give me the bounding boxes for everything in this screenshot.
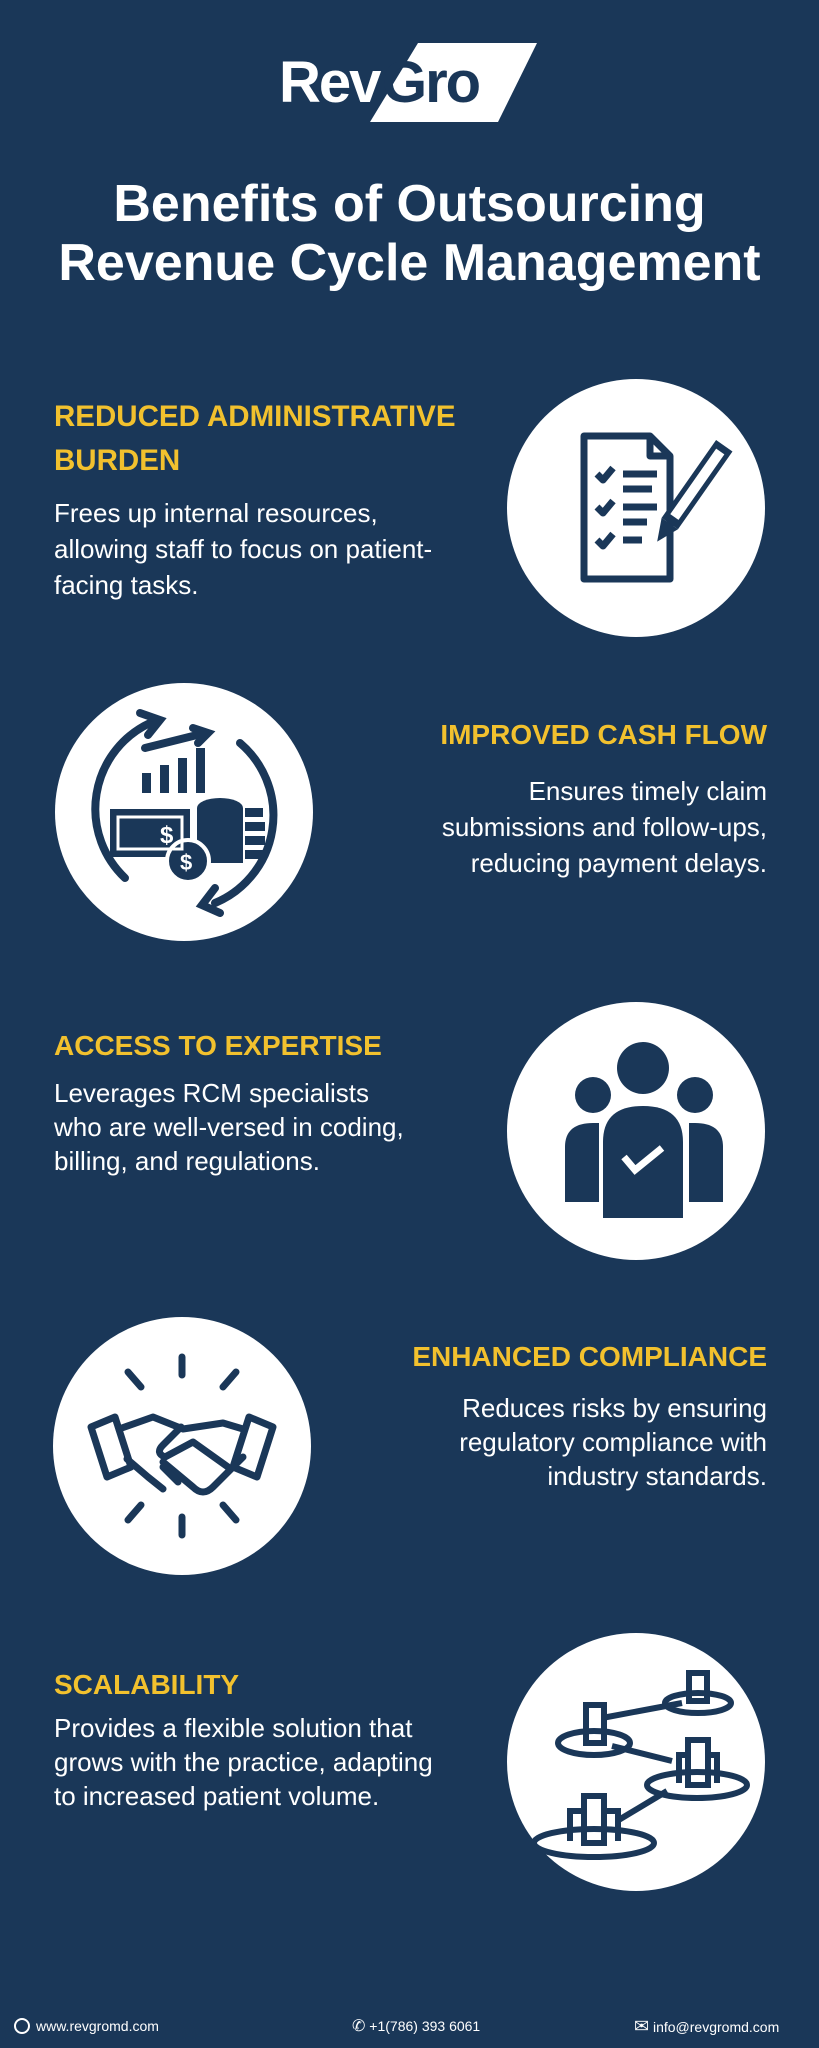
text block: allowing staff to focus on patient- (54, 534, 432, 564)
panel: access to expertise (54, 1030, 404, 1176)
text block: who are well-versed in coding, (54, 1112, 404, 1142)
text block: Provides a flexible solution that (54, 1713, 412, 1743)
icon: money cycle (55, 683, 313, 941)
icon: money cycle: $ (160, 822, 174, 849)
text block: Reduces risks by ensuring (462, 1393, 767, 1423)
icon: handshake (53, 1317, 311, 1575)
panel: scalability (54, 1669, 433, 1811)
text block: facing tasks. (54, 570, 199, 600)
panel: reduced administrative burden (54, 400, 456, 600)
text block: Ensures timely claim (529, 776, 767, 806)
heading: ENHANCED COMPLIANCE (412, 1341, 767, 1372)
icon: team with check (507, 1002, 765, 1260)
title (58, 175, 761, 292)
text block: submissions and follow-ups, (442, 812, 767, 842)
footer: website: www.revgromd.com (36, 2018, 159, 2034)
text block (54, 1078, 404, 1176)
footer: email: ✉ info@revgromd.com (634, 2016, 779, 2036)
heading: ACCESS TO EXPERTISE (54, 1030, 382, 1061)
text block (459, 1393, 767, 1491)
text block: grows with the practice, adapting (54, 1747, 433, 1777)
panel: improved cash flow (440, 719, 767, 878)
logo: Gro (382, 50, 480, 115)
heading: IMPROVED CASH FLOW (440, 719, 767, 750)
text block: reducing payment delays. (471, 848, 767, 878)
logo (279, 43, 537, 122)
icon: checklist with pen (507, 379, 765, 637)
footer: phone: ✆ +1(786) 393 6061 (352, 2018, 480, 2035)
heading (54, 400, 456, 477)
title: Revenue Cycle Management (58, 234, 761, 292)
heading: BURDEN (54, 444, 180, 477)
logo: Rev (279, 50, 381, 115)
text block (54, 498, 432, 600)
title: Benefits of Outsourcing (113, 175, 706, 233)
text block (442, 776, 767, 878)
panel: enhanced compliance (412, 1341, 767, 1491)
heading: SCALABILITY (54, 1669, 239, 1700)
text block: billing, and regulations. (54, 1146, 320, 1176)
icon: money cycle: $ (180, 850, 192, 875)
text block: Frees up internal resources, (54, 498, 378, 528)
text block: to increased patient volume. (54, 1781, 379, 1811)
icon: network growth (507, 1633, 765, 1891)
text block (54, 1713, 433, 1811)
text block: Leverages RCM specialists (54, 1078, 369, 1108)
text block: regulatory compliance with (459, 1427, 767, 1457)
heading: REDUCED ADMINISTRATIVE (54, 400, 456, 433)
text block: industry standards. (547, 1461, 767, 1491)
